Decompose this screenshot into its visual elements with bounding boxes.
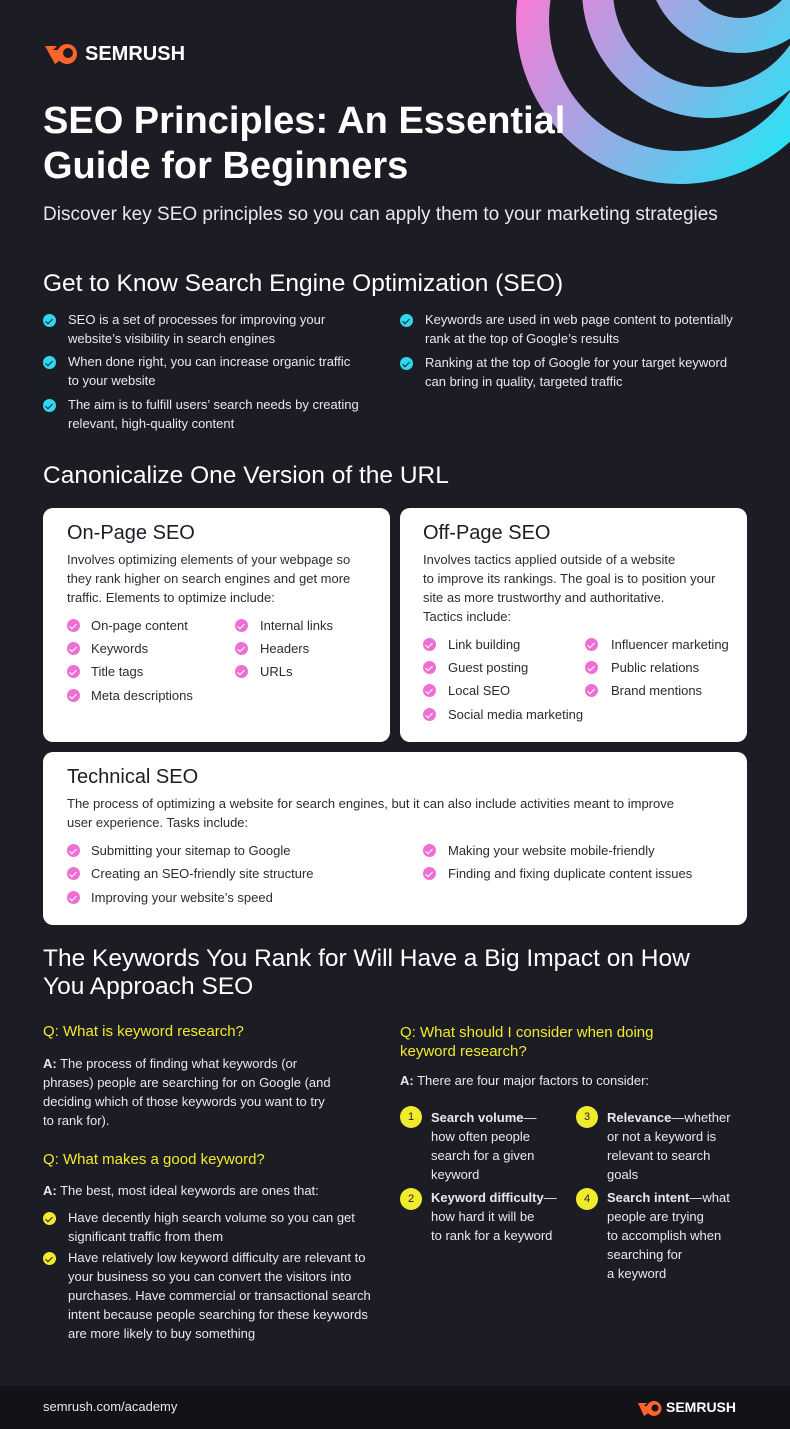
right column: factors: 2 [408, 1193, 414, 1205]
right column: factors: how often people [431, 1129, 530, 1144]
left column: keyword Q&A: significant traffic from them [68, 1229, 223, 1244]
right column: factors: Keyword difficulty— [431, 1190, 557, 1205]
bullets: SEO intro: When done right, you can increase organic traffic [68, 354, 350, 369]
panel: on-page SEO: On-Page SEO [67, 522, 195, 544]
right column: factors: 1 [408, 1111, 414, 1123]
footer: SEMRUSH [666, 1399, 736, 1415]
panel: off-page SEO: Involves tactics applied outside of a website [423, 552, 675, 567]
right column: factors: a keyword [607, 1266, 666, 1281]
bullets: SEO intro: Ranking at the top of Google for your target keyword [425, 355, 727, 370]
panel: on-page SEO: URLs [260, 664, 293, 679]
panel: off-page SEO: Social media marketing [448, 707, 583, 722]
right column: factors: keyword [431, 1167, 479, 1182]
panel: technical SEO: Technical SEO [67, 766, 198, 788]
logo: SEMRUSH [85, 43, 185, 65]
right column: factors: goals [607, 1167, 638, 1182]
heading: keywords [43, 945, 690, 1000]
panel: technical SEO: The process of optimizing a website for search engines, but it can also include activities meant to improve [67, 796, 674, 811]
left column: keyword Q&A: Have relatively low keyword difficulty are relevant to [68, 1250, 365, 1265]
bullets: SEO intro: website’s visibility in search engines [68, 331, 275, 346]
right column: factors: how hard it will be [431, 1209, 534, 1224]
left column: keyword Q&A: are more likely to buy something [68, 1326, 255, 1341]
bullets: SEO intro [43, 312, 733, 431]
panel: technical SEO: Improving your website’s speed [91, 890, 273, 905]
bullets: SEO intro: relevant, high-quality content [68, 416, 234, 431]
footer [0, 1386, 790, 1429]
panel: on-page SEO [43, 508, 390, 742]
panel: off-page SEO: Tactics include: [423, 609, 511, 624]
right column: factors: relevant to search [607, 1148, 710, 1163]
heading: keywords: You Approach SEO [43, 973, 253, 1000]
panel: off-page SEO: Brand mentions [611, 683, 702, 698]
panel: off-page SEO [400, 508, 747, 742]
bullets: SEO intro: Keywords are used in web page content to potentially [425, 312, 733, 327]
left column: keyword Q&A: A: The process of finding what keywords (or [43, 1056, 297, 1071]
panel: on-page SEO: Title tags [91, 664, 143, 679]
panel: on-page SEO: On-page content [91, 618, 188, 633]
right column: factors [400, 1024, 731, 1281]
panel: off-page SEO: to improve its rankings. The goal is to position your [423, 571, 715, 586]
panel: technical SEO: Creating an SEO-friendly site structure [91, 866, 314, 881]
heading: get to know SEO: Get to Know Search Engine Optimization (SEO) [43, 270, 563, 297]
bullets: SEO intro: to your website [68, 373, 155, 388]
right column: factors: 3 [584, 1111, 590, 1123]
panel: technical SEO: Submitting your sitemap to Google [91, 843, 290, 858]
left column: keyword Q&A [43, 1023, 371, 1341]
panel: off-page SEO: Public relations [611, 660, 699, 675]
bullets: SEO intro: SEO is a set of processes for improving your [68, 312, 325, 327]
right column: factors: to rank for a keyword [431, 1228, 552, 1243]
right column: factors: 4 [584, 1193, 590, 1205]
bullets: SEO intro: can bring in quality, targeted traffic [425, 374, 623, 389]
panel: off-page SEO: Local SEO [448, 683, 510, 698]
right column: factors: Search volume— [431, 1110, 536, 1125]
bullets: SEO intro: The aim is to fulfill users’ search needs by creating [68, 397, 359, 412]
panel: off-page SEO: Link building [448, 637, 520, 652]
right column: factors: A: There are four major factors to consider: [400, 1073, 649, 1088]
right column: factors: keyword research? [400, 1043, 527, 1060]
title [43, 100, 565, 187]
right column: factors: Search intent—what [607, 1190, 730, 1205]
left column: keyword Q&A: Q: What makes a good keyword? [43, 1151, 265, 1168]
right column: factors: to accomplish when [607, 1228, 721, 1243]
panel: off-page SEO: Off-Page SEO [423, 522, 550, 544]
title: SEO Principles: An Essential [43, 100, 565, 142]
title: Guide for Beginners [43, 145, 408, 187]
left column: keyword Q&A: intent because people searching for these keywords [68, 1307, 368, 1322]
left column: keyword Q&A: A: The best, most ideal keywords are ones that: [43, 1183, 319, 1198]
left column: keyword Q&A: phrases) people are searching for on Google (and [43, 1075, 331, 1090]
panel: technical SEO [43, 752, 747, 925]
right column: factors: people are trying [607, 1209, 704, 1224]
left column: keyword Q&A: deciding which of those keywords you want to try [43, 1094, 325, 1109]
right column: factors: Q: What should I consider when doing [400, 1024, 653, 1041]
right column: factors: or not a keyword is [607, 1129, 716, 1144]
panel: off-page SEO: Influencer marketing [611, 637, 729, 652]
panel: off-page SEO: site as more trustworthy and authoritative. [423, 590, 664, 605]
panel: on-page SEO: Internal links [260, 618, 333, 633]
panel: off-page SEO: Guest posting [448, 660, 528, 675]
panel: on-page SEO: Headers [260, 641, 309, 656]
left column: keyword Q&A: to rank for). [43, 1113, 109, 1128]
heading: keywords: The Keywords You Rank for Will Have a Big Impact on How [43, 945, 690, 972]
panel: technical SEO: Making your website mobile-friendly [448, 843, 655, 858]
panel: on-page SEO: they rank higher on search engines and get more [67, 571, 350, 586]
panel: on-page SEO: Meta descriptions [91, 688, 193, 703]
right column: factors: searching for [607, 1247, 682, 1262]
panel: on-page SEO: traffic. Elements to optimize include: [67, 590, 275, 605]
left column: keyword Q&A: purchases. Have commercial or transactional search [68, 1288, 371, 1303]
bullets: SEO intro: rank at the top of Google’s results [425, 331, 619, 346]
left column: keyword Q&A: Q: What is keyword research? [43, 1023, 244, 1040]
panel: on-page SEO: Involves optimizing elements of your webpage so [67, 552, 350, 567]
subtitle: Discover key SEO principles so you can apply them to your marketing strategies [43, 204, 718, 225]
panel: technical SEO: Finding and fixing duplicate content issues [448, 866, 692, 881]
footer: semrush.com/academy [43, 1399, 177, 1414]
decorative rings [516, 0, 790, 184]
left column: keyword Q&A: your business so you can convert the visitors into [68, 1269, 351, 1284]
right column: factors: search for a given [431, 1148, 534, 1163]
panel: technical SEO: user experience. Tasks include: [67, 815, 248, 830]
panel: on-page SEO: Keywords [91, 641, 148, 656]
right column: factors: Relevance—whether [607, 1110, 731, 1125]
left column: keyword Q&A: Have decently high search volume so you can get [68, 1210, 355, 1225]
heading: canonicalize: Canonicalize One Version of the URL [43, 462, 449, 489]
